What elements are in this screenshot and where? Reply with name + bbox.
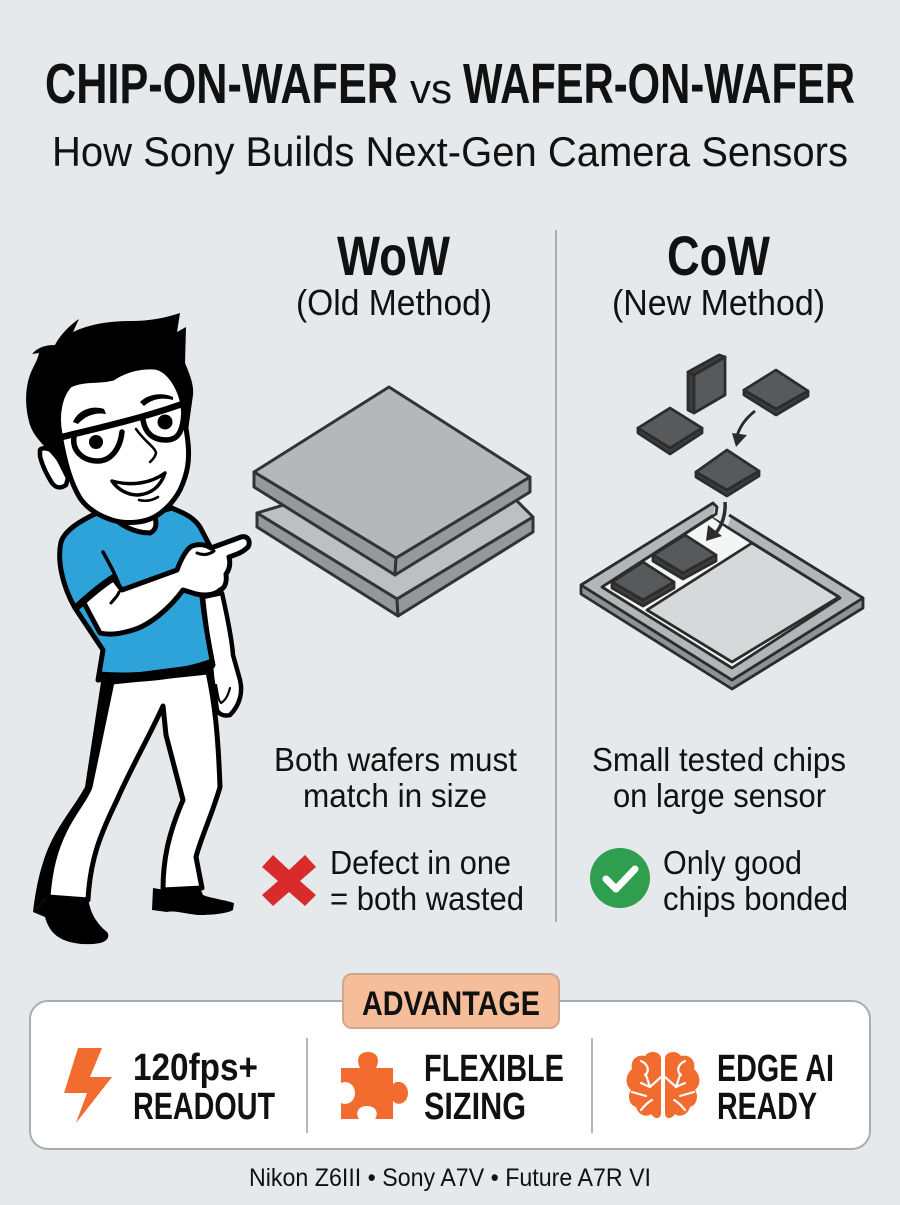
- text: flexible sizing: FLEXIBLE: [424, 1048, 564, 1090]
- eyes and eyebrows: [73, 394, 173, 449]
- ear: [40, 448, 68, 487]
- illustration: person pointing: [26, 313, 249, 944]
- falling chip: centre: [696, 450, 759, 496]
- footer: Nikon Z6III • Sony A7V • Future A7R VI: [249, 1164, 651, 1192]
- neck: [108, 512, 156, 533]
- text: WoW drawback: = both wasted: [330, 880, 524, 917]
- text: edge AI: READY: [717, 1086, 817, 1128]
- bonded chips: [612, 535, 716, 606]
- text: CoW benefit: [663, 844, 848, 917]
- sensor area: [647, 543, 839, 662]
- text: WoW drawback: [330, 844, 524, 917]
- panel: advantage: [30, 974, 870, 1149]
- badge: advantage: [343, 974, 559, 1028]
- illustration: chips on sensor: [581, 355, 863, 689]
- text: CoW caption: on large sensor: [613, 777, 826, 814]
- lower wafer: [257, 500, 533, 616]
- blue shirt: [60, 508, 213, 681]
- arrow: chip to sensor: [706, 502, 725, 541]
- arrow: chip to chip: [732, 411, 755, 447]
- text: flexible sizing: SIZING: [424, 1086, 526, 1128]
- mouth: [112, 473, 165, 495]
- nose: [136, 429, 156, 462]
- title: [45, 52, 855, 116]
- heading: CoW: (New Method): [612, 282, 825, 323]
- heading: WoW: (Old Method): [296, 282, 492, 323]
- heading: WoW: [296, 224, 492, 323]
- icon: lightning bolt: [64, 1048, 112, 1123]
- glasses: [58, 404, 184, 461]
- trousers: [33, 672, 220, 912]
- title: vs: [410, 65, 452, 112]
- subtitle: How Sony Builds Next-Gen Camera Sensors: [52, 128, 848, 175]
- icon: green check: [590, 848, 650, 908]
- face: [58, 367, 189, 523]
- text: readout: [133, 1047, 275, 1128]
- substrate frame: [581, 500, 863, 689]
- text: WoW caption: [274, 741, 517, 814]
- icon: red cross: [262, 855, 316, 906]
- text: CoW caption: [592, 741, 846, 814]
- upper wafer: [254, 387, 530, 575]
- text: flexible sizing: [424, 1048, 564, 1128]
- falling chip: vertical: [688, 355, 725, 413]
- heading: CoW: CoW: [667, 224, 770, 287]
- text: CoW benefit: chips bonded: [663, 880, 848, 917]
- pointing arm and hand: [78, 537, 249, 634]
- illustration: stacked wafers: [254, 387, 533, 616]
- badge: advantage: ADVANTAGE: [362, 985, 540, 1023]
- shoes: [33, 888, 234, 944]
- text: edge AI: [717, 1048, 834, 1128]
- text: WoW drawback: Defect in one: [330, 844, 511, 881]
- text: CoW caption: Small tested chips: [592, 741, 846, 778]
- hair: [26, 313, 193, 465]
- text: edge AI: EDGE AI: [717, 1048, 834, 1090]
- title: CHIP-ON-WAFER: [45, 52, 398, 116]
- heading: CoW: [612, 224, 825, 323]
- far arm and hand: [203, 593, 241, 716]
- text: WoW caption: match in size: [303, 777, 487, 814]
- falling chip: left: [638, 408, 702, 454]
- text: readout: READOUT: [133, 1086, 275, 1128]
- heading: WoW: WoW: [337, 224, 450, 287]
- icon: brain: [627, 1052, 699, 1118]
- falling chip: right: [744, 370, 808, 415]
- text: CoW benefit: Only good: [663, 844, 802, 881]
- text: readout: 120fps+: [133, 1047, 258, 1089]
- icon: puzzle piece: [341, 1052, 408, 1119]
- text: WoW caption: Both wafers must: [274, 741, 517, 778]
